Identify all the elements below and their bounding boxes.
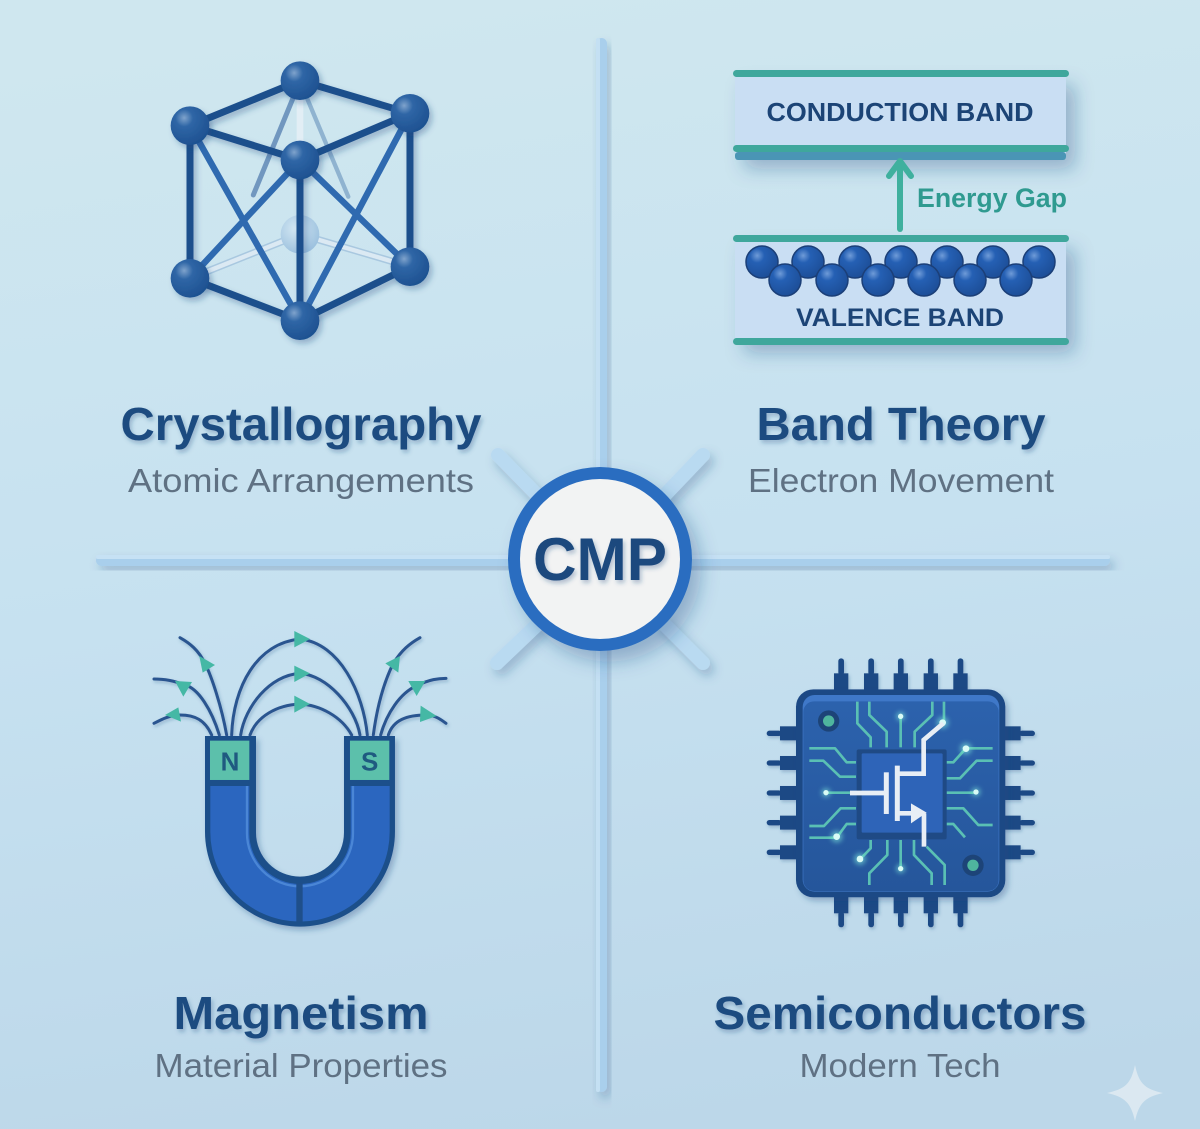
heading: band theory: Band Theory xyxy=(756,398,1046,450)
panel: semiconductors xyxy=(714,658,1086,1084)
conduction band: CONDUCTION BAND xyxy=(766,97,1034,127)
hub label: CMP xyxy=(533,526,667,593)
hub ring xyxy=(508,467,692,651)
north pole xyxy=(210,741,249,780)
chip body xyxy=(796,689,1005,897)
icon: sparkle mark xyxy=(1107,1065,1163,1121)
glowing nodes xyxy=(821,712,981,873)
energy gap arrow xyxy=(889,161,911,229)
panel: band theory xyxy=(733,70,1069,499)
south pole xyxy=(350,741,389,780)
icon: band diagram xyxy=(733,70,1069,345)
chip pins xyxy=(767,658,1035,927)
subtitle: atomic arrangements: Atomic Arrangements xyxy=(128,462,474,499)
panel: magnetism xyxy=(154,631,447,1084)
hub spokes xyxy=(497,455,703,663)
energy gap label: Energy Gap xyxy=(917,183,1067,213)
hub disc xyxy=(520,479,680,639)
south pole: S xyxy=(361,747,378,777)
central die xyxy=(857,749,947,839)
subtitle: modern tech: Modern Tech xyxy=(800,1047,1000,1084)
icon: microchip xyxy=(767,658,1035,927)
icon: crystal lattice xyxy=(171,61,429,340)
magnet body xyxy=(205,736,395,927)
subtitle: material properties: Material Properties xyxy=(154,1047,448,1084)
central hub xyxy=(497,455,703,663)
icon: horseshoe magnet xyxy=(154,631,446,927)
circuit traces xyxy=(809,702,993,885)
heading: magnetism: Magnetism xyxy=(174,987,428,1039)
north pole: N xyxy=(221,747,239,777)
conduction band xyxy=(733,70,1069,160)
field arrows xyxy=(165,631,437,722)
divider: horizontal axis xyxy=(96,555,1110,566)
heading: semiconductors: Semiconductors xyxy=(714,987,1086,1039)
subtitle: electron movement: Electron Movement xyxy=(748,462,1054,499)
valence band xyxy=(733,235,1069,345)
panel: crystallography xyxy=(120,61,482,499)
mounting holes xyxy=(818,710,984,876)
transistor symbol xyxy=(850,723,943,847)
field lines xyxy=(154,638,446,735)
divider: vertical axis xyxy=(596,38,607,1092)
valence band: VALENCE BAND xyxy=(796,304,1004,332)
heading: crystallography: Crystallography xyxy=(120,398,482,450)
